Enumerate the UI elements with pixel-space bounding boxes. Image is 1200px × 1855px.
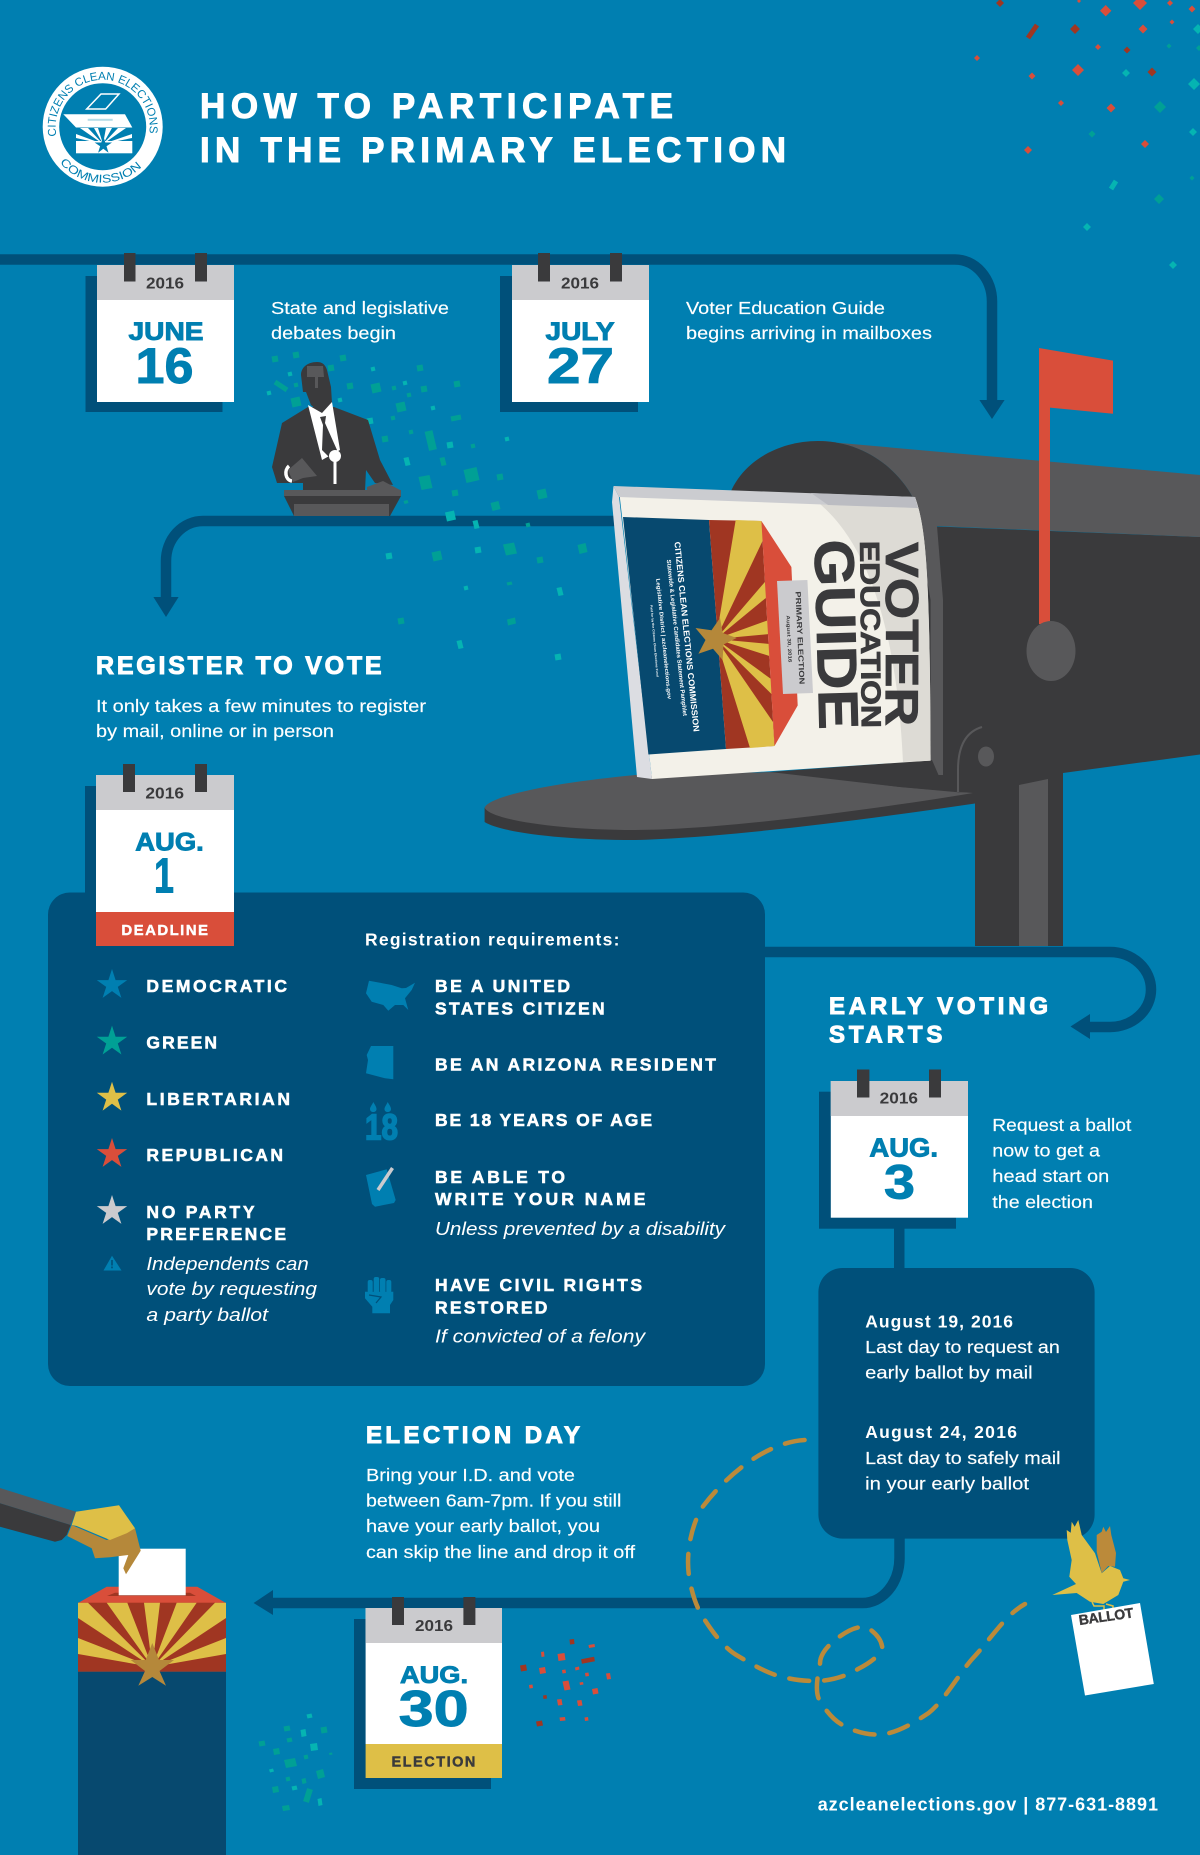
requirements list <box>365 930 726 1346</box>
requirement: write name: Unless prevented by a disability <box>435 1219 726 1239</box>
mailbox <box>485 348 1200 946</box>
timeline arrow: mailbox to register <box>153 521 620 617</box>
calendar: June 16: 2016 <box>146 276 184 292</box>
cover panel text: CITIZENS CLEAN ELECTIONS COMMISSION <box>672 541 702 732</box>
heading and text: election day <box>366 1422 635 1562</box>
ballot box <box>0 1488 226 1855</box>
ballot paper: BALLOT <box>1078 1604 1135 1628</box>
text: debates begin: debates begin <box>271 323 396 343</box>
primary election label <box>777 580 813 694</box>
label: green: GREEN <box>146 1033 217 1053</box>
star: democratic <box>97 969 127 998</box>
heading and text: election day: can skip the line and drop it off <box>366 1542 635 1562</box>
text: request a ballot: now to get a <box>992 1140 1100 1160</box>
bird body <box>1052 1520 1130 1604</box>
note: independents <box>146 1254 317 1325</box>
requirement: citizen: BE A UNITED <box>435 976 570 996</box>
star: no party preference <box>97 1195 127 1224</box>
calendar: Aug 1 deadline <box>96 764 234 946</box>
deadline: August 19: early ballot by mail <box>865 1363 1033 1383</box>
deadline: August 19: August 19, 2016 <box>865 1311 1013 1331</box>
requirement: citizen: STATES CITIZEN <box>435 998 605 1018</box>
calendar: July 27: 2016 <box>561 276 599 292</box>
heading and text: election day: ELECTION DAY <box>366 1422 580 1449</box>
star: libertarian <box>97 1082 127 1111</box>
speaker head <box>301 362 332 414</box>
heading: early voting starts <box>829 993 1048 1049</box>
cover sun rays <box>709 520 774 749</box>
requirement: write name: BE ABLE TO <box>435 1167 565 1187</box>
calendar: Aug 3 <box>819 1070 968 1229</box>
heading and text: register to vote <box>96 652 426 741</box>
requirement: citizen <box>435 976 605 1018</box>
calendar: Aug 3: AUG. <box>869 1132 938 1162</box>
heading: early voting starts: STARTS <box>829 1022 942 1049</box>
requirement: write name: WRITE YOUR NAME <box>435 1189 645 1209</box>
heading and text: election day: between 6am-7pm. If you still <box>366 1491 621 1511</box>
deadline: August 24 <box>865 1422 1060 1494</box>
speaker at podium <box>272 362 401 516</box>
deadline: August 24: August 24, 2016 <box>865 1422 1017 1442</box>
label: libertarian: LIBERTARIAN <box>146 1089 290 1109</box>
icon: arizona <box>366 1046 393 1079</box>
arrow: early voting to election day <box>254 1535 900 1615</box>
text: request a ballot: Request a ballot <box>992 1115 1131 1135</box>
party list <box>97 969 317 1325</box>
requirement: civil rights: RESTORED <box>435 1297 547 1317</box>
deadline: August 19: Last day to request an <box>865 1337 1060 1357</box>
text: voter education guide arrives <box>686 298 932 343</box>
title: IN THE PRIMARY ELECTION <box>200 131 786 170</box>
box star <box>131 1643 174 1686</box>
title: HOW TO PARTICIPATE <box>200 87 673 126</box>
cover blue panel <box>623 517 726 754</box>
bird back wing <box>1097 1526 1116 1573</box>
cover title: GUIDE <box>803 539 870 730</box>
requirement: write name <box>435 1167 726 1239</box>
calendar: Aug 30 election: ELECTION <box>392 1755 475 1771</box>
calendar: Aug 30 election: 30 <box>399 1680 469 1737</box>
heading and text: election day: have your early ballot, you <box>366 1516 600 1536</box>
text: request a ballot <box>992 1115 1131 1212</box>
requirement: resident: BE AN ARIZONA RESIDENT <box>435 1054 716 1074</box>
shirt and tie <box>308 402 340 460</box>
bird flight path: dashed line <box>688 1440 1025 1735</box>
cover ballot box lid <box>761 521 798 746</box>
heading: early voting starts: EARLY VOTING <box>829 993 1048 1020</box>
speaker body <box>272 407 393 491</box>
calendar: July 27: 27 <box>547 338 614 394</box>
requirement: civil rights <box>435 1275 646 1346</box>
deadline: August 24: Last day to safely mail <box>865 1448 1060 1468</box>
heading and text: register to vote: REGISTER TO VOTE <box>96 652 382 680</box>
icon: 18 candles: 18 <box>365 1106 398 1147</box>
hands <box>286 466 292 481</box>
calendar: Aug 30 election: AUG. <box>400 1662 468 1689</box>
primary election label: PRIMARY ELECTION <box>793 591 807 685</box>
microphone <box>329 450 341 462</box>
note: independents: Independents can <box>146 1254 309 1274</box>
ballot being dropped <box>119 1549 186 1595</box>
panel: registration <box>48 892 765 1386</box>
box base <box>78 1672 226 1855</box>
icon: united states map <box>366 981 415 1011</box>
tray door <box>485 772 975 840</box>
calendar: Aug 1 deadline: AUG. <box>135 829 204 857</box>
cover title <box>803 539 928 730</box>
podium <box>284 490 401 496</box>
flag knob <box>1026 621 1076 681</box>
hand and sleeve <box>0 1488 141 1574</box>
text: debates begin: State and legislative <box>271 298 449 318</box>
calendar: June 16 <box>86 253 234 412</box>
requirement: age: BE 18 YEARS OF AGE <box>435 1110 652 1130</box>
confetti: top right <box>974 0 1200 269</box>
text: debates begin <box>271 298 449 343</box>
cover panel text <box>649 541 702 732</box>
cover panel text: Legislative District | azcleanelections.gov <box>654 578 672 700</box>
cover star <box>696 618 737 660</box>
cover title: VOTER <box>876 542 928 726</box>
deadline: August 24: in your early ballot <box>865 1474 1029 1494</box>
confetti: around speaker <box>266 352 588 660</box>
star: green <box>97 1026 127 1054</box>
requirement: civil rights: If convicted of a felony <box>435 1326 646 1346</box>
calendar: Aug 1 deadline: DEADLINE <box>121 922 208 939</box>
booklet spine <box>612 486 652 779</box>
label: no party preference: NO PARTY <box>146 1202 255 1222</box>
door opening arch <box>731 441 925 600</box>
deadline: August 19 <box>865 1311 1060 1383</box>
calendar: Aug 3: 3 <box>884 1156 915 1210</box>
heading and text: register to vote: It only takes a few minutes to register <box>96 696 426 716</box>
primary election label: August 30, 2016 <box>784 615 793 663</box>
label: no party preference <box>146 1202 286 1244</box>
text: voter education guide arrives: begins arriving in mailboxes <box>686 323 932 343</box>
calendar: July 27: JULY <box>546 318 615 346</box>
calendar: Aug 3: 2016 <box>880 1090 918 1107</box>
heading and text: election day: Bring your I.D. and vote <box>366 1465 575 1485</box>
arizona flag sun rays <box>78 1603 226 1672</box>
panel: early ballot deadlines <box>818 1268 1095 1539</box>
timeline arrow: top to mailbox <box>0 260 1005 419</box>
logo: Citizens Clean Elections Commission seal <box>42 66 163 187</box>
calendar: June 16: JUNE <box>128 318 204 346</box>
calendar: Aug 1 deadline: 2016 <box>145 786 184 803</box>
cover title: EDUCATION <box>854 541 887 728</box>
icon: warning triangle <box>104 1256 122 1270</box>
hinge <box>956 725 984 790</box>
confetti: red near calendar <box>520 1639 611 1726</box>
calendar: Aug 30 election: 2016 <box>415 1618 453 1635</box>
text: request a ballot: the election <box>992 1192 1093 1212</box>
cover panel text: Statewide & Legislative Candidates Statement Pamphlet <box>665 560 687 716</box>
mailbox top light band and door rim <box>818 441 1200 775</box>
label: no party preference: PREFERENCE <box>146 1224 286 1244</box>
star: republican <box>97 1138 127 1167</box>
mailbox post and dark body <box>925 526 1200 946</box>
booklet cover <box>619 490 931 779</box>
footer: website and phone: azcleanelections.gov | 877-631-8891 <box>818 1794 1158 1814</box>
icon: raised fist <box>365 1277 393 1313</box>
text: voter education guide arrives: Voter Education Guide <box>686 298 885 318</box>
note: independents: a party ballot <box>146 1305 269 1325</box>
label: democratic: DEMOCRATIC <box>146 976 287 996</box>
cover panel text: Paid for by the Citizens Clean Elections Fund <box>649 605 660 677</box>
logo: Citizens Clean Elections Commission seal: CITIZENS CLEAN ELECTIONS <box>48 72 158 136</box>
box lid <box>78 1587 226 1603</box>
calendar: Aug 30 election <box>354 1597 502 1789</box>
bird feet <box>1092 1602 1113 1611</box>
note: independents: vote by requesting <box>146 1279 317 1299</box>
connector line: panel to early voting <box>760 952 1151 1039</box>
flag <box>1039 348 1113 624</box>
calendar: June 16: 16 <box>136 338 194 394</box>
calendar: Aug 1 deadline: 1 <box>154 850 174 904</box>
label: republican: REPUBLICAN <box>146 1145 283 1165</box>
calendar shadow: Aug 1 <box>85 786 115 906</box>
title <box>200 87 786 170</box>
calendar: July 27 <box>500 253 649 412</box>
confetti: teal near calendar <box>258 1714 332 1811</box>
text: request a ballot: head start on <box>992 1166 1109 1186</box>
requirement: civil rights: HAVE CIVIL RIGHTS <box>435 1275 642 1295</box>
logo: Citizens Clean Elections Commission seal: COMMISSION <box>62 159 141 183</box>
bird carrying ballot <box>1052 1520 1154 1696</box>
icon: notepad and pen <box>366 1168 396 1207</box>
ballot paper <box>1071 1603 1154 1696</box>
connector: calendar to early ballot panel <box>894 1225 904 1273</box>
heading: registration requirements: Registration requirements: <box>365 930 619 950</box>
voter education guide booklet <box>612 486 931 779</box>
heading and text: register to vote: by mail, online or in person <box>96 721 334 741</box>
